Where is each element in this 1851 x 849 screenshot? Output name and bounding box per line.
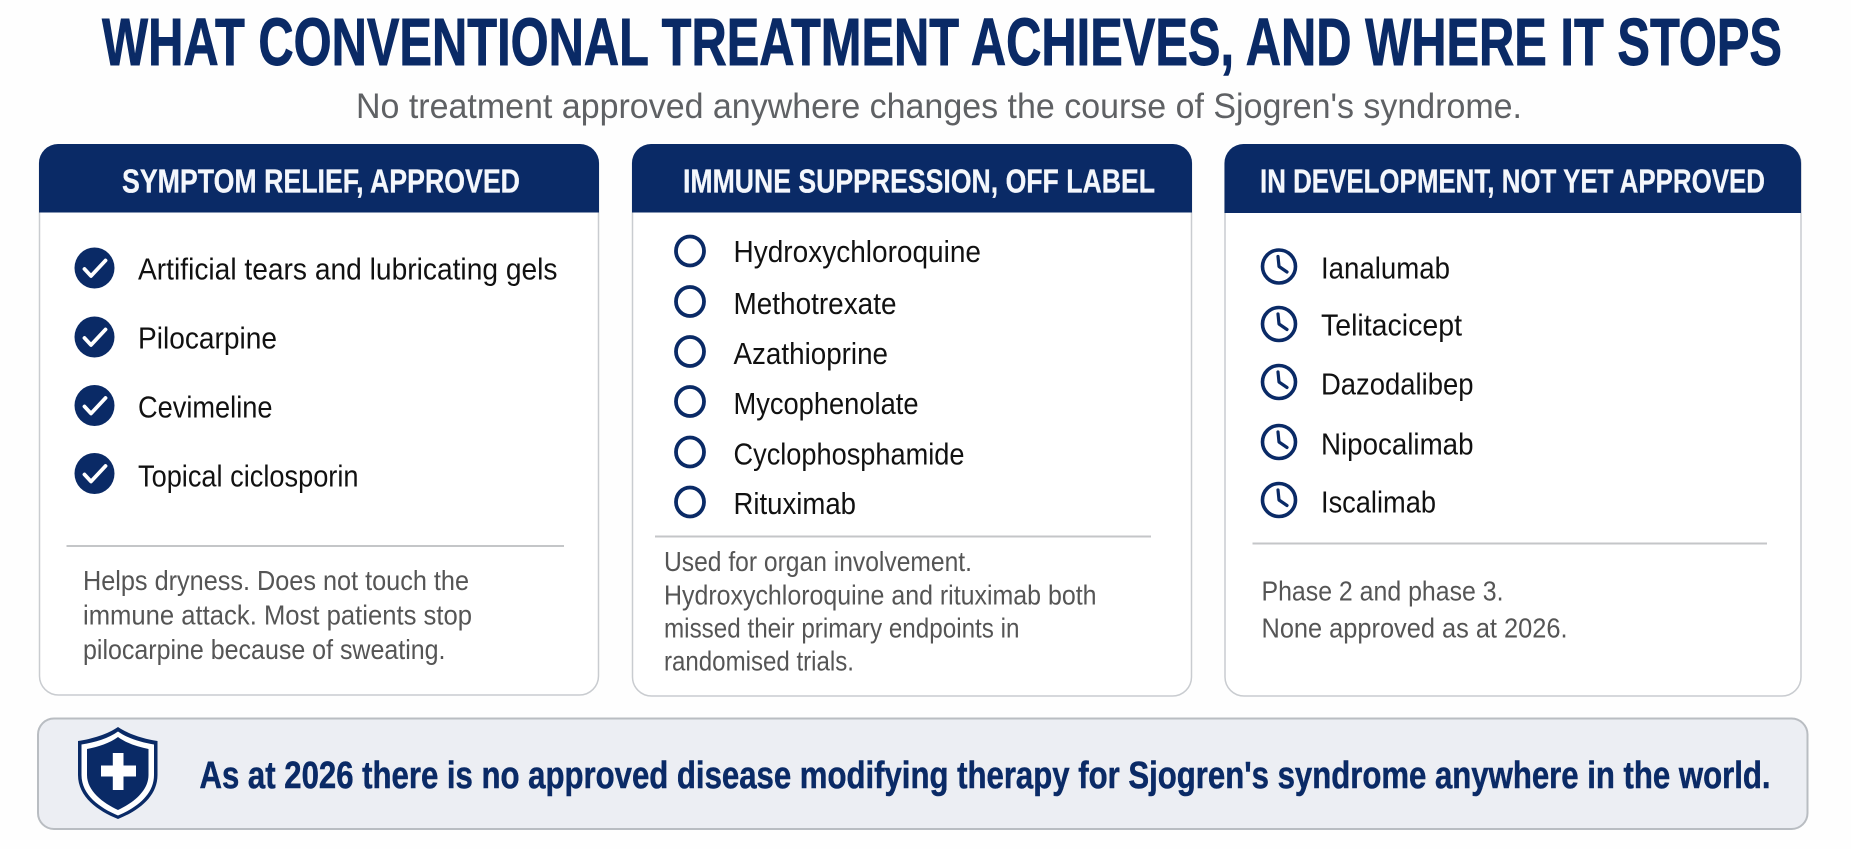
panel: in development, not yet approved	[1224, 144, 1801, 696]
icon: clock	[1262, 308, 1296, 340]
note text: Used for organ involvement.	[664, 546, 972, 577]
icon: ring	[676, 287, 704, 316]
item text: Hydroxychloroquine	[734, 235, 981, 269]
icon: shield with cross	[78, 727, 158, 819]
item text: Artificial tears and lubricating gels	[138, 252, 558, 286]
item text: Iscalimab	[1321, 486, 1436, 520]
item text: Azathioprine	[734, 337, 888, 371]
panel header: in development	[1224, 144, 1801, 213]
panel: symptom relief, approved	[39, 144, 599, 695]
item text: Ianalumab	[1321, 252, 1450, 286]
item text: Topical ciclosporin	[138, 460, 358, 494]
icon: check	[74, 248, 114, 288]
icon: clock	[1262, 366, 1296, 398]
panel header: immune suppression	[632, 144, 1192, 212]
item text: Pilocarpine	[138, 322, 277, 356]
callout banner	[38, 718, 1808, 829]
icon: check	[74, 385, 114, 426]
note text: pilocarpine because of sweating.	[83, 634, 446, 665]
icon: ring	[676, 236, 704, 266]
icon: clock	[1262, 484, 1296, 516]
item text: Cevimeline	[138, 390, 272, 424]
note text	[83, 565, 472, 665]
item text: Telitacicept	[1321, 308, 1462, 342]
item text: Nipocalimab	[1321, 428, 1474, 462]
note text	[1262, 576, 1568, 644]
panel header: immune suppression: IMMUNE SUPPRESSION, OFF LABEL	[683, 162, 1155, 200]
panel header: symptom relief: SYMPTOM RELIEF, APPROVED	[122, 162, 520, 200]
note text: Helps dryness. Does not touch the	[83, 565, 469, 596]
note text: missed their primary endpoints in	[664, 612, 1020, 644]
icon: ring	[676, 387, 704, 416]
note text: None approved as at 2026.	[1262, 612, 1568, 644]
item text: Dazodalibep	[1321, 368, 1474, 402]
note text: immune attack. Most patients stop	[83, 600, 472, 630]
icon: check	[74, 453, 114, 494]
icon: clock	[1262, 426, 1296, 458]
note text	[664, 546, 1096, 676]
icon: ring	[676, 488, 704, 516]
panel header: symptom relief	[39, 144, 599, 212]
note text: randomised trials.	[664, 646, 854, 676]
icon: check	[74, 316, 114, 358]
note text: Phase 2 and phase 3.	[1262, 576, 1504, 606]
panel: immune suppression, off label	[632, 144, 1192, 696]
item text: Mycophenolate	[734, 387, 918, 421]
icon: ring	[676, 438, 704, 466]
subtitle: No treatment approved anywhere changes the course of Sjogren's syndrome.	[356, 87, 1522, 126]
icon: ring	[676, 337, 704, 366]
note text: Hydroxychloroquine and rituximab both	[664, 580, 1096, 610]
item text: Methotrexate	[734, 287, 896, 321]
item text: Rituximab	[734, 487, 856, 521]
item text: Cyclophosphamide	[734, 438, 964, 472]
icon: clock	[1262, 250, 1296, 283]
